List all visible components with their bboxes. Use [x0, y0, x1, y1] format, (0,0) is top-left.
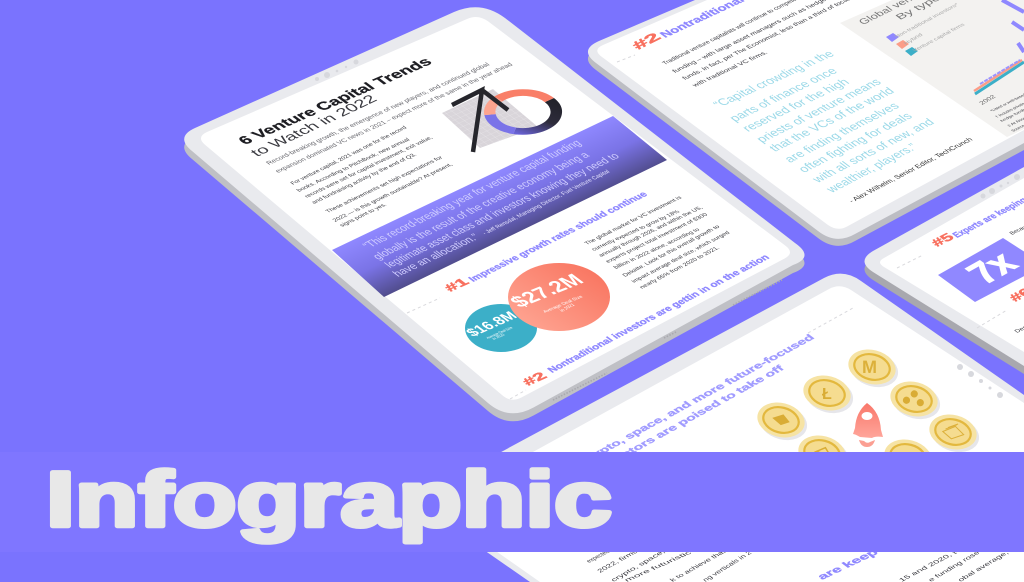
pull quote — [710, 48, 937, 195]
heading number 2: #2 — [629, 31, 665, 52]
quote text — [359, 138, 622, 279]
chart legend: Non-traditional investors* — [893, 2, 961, 39]
tablet 4 body — [412, 274, 1024, 582]
pull quote: priests of venture means — [753, 76, 884, 145]
pull quote: wealthier, players.” — [822, 141, 920, 195]
tablet 3 side text — [1006, 222, 1024, 334]
tablet 3 side — [864, 175, 1024, 374]
gold coins — [753, 345, 983, 482]
tablet 4 bezel sensors — [957, 364, 1003, 398]
body paragraph 1: books. According to PitchBook, new annual — [295, 137, 412, 193]
tablet 1 bezel sensors — [315, 60, 358, 81]
chart title — [857, 0, 958, 27]
70 chart graphic — [442, 85, 570, 152]
pull quote: “Capital crowding in the — [710, 48, 837, 110]
body paragraph 2: 2022 — is this growth sustainable? At present, — [331, 162, 455, 223]
chart footnotes: *Listed or web-based — [989, 93, 1024, 113]
growth paragraph: annually through 2026, and within the US, — [597, 205, 705, 258]
pull quote: that the VCs of the world — [766, 85, 897, 154]
growth paragraph — [583, 195, 732, 290]
growth paragraph: currently expected to grow by 18% — [590, 209, 682, 252]
tablet 2 side — [588, 7, 1024, 246]
stacked bar chart — [974, 0, 1024, 94]
circle stat: 16.8M — [462, 304, 537, 352]
axis label 2002: 2002 — [978, 94, 998, 106]
tablet 3 side text: Despite — [1013, 320, 1024, 334]
circle stat: 27.2M: in 2021 — [559, 303, 576, 313]
growth paragraph: The global market for VC investment is — [583, 195, 684, 246]
heading number 2: #2 — [519, 370, 551, 388]
tablet 3 body — [864, 167, 1024, 366]
heading number 5: #5 — [928, 231, 958, 249]
tablet 2 body — [588, 0, 1024, 239]
chart footnotes: † Includes private — [994, 102, 1024, 119]
chart footnotes: hedge funds — [999, 107, 1024, 123]
coin: ripple — [886, 377, 944, 424]
chart footnotes: Source — [1010, 124, 1024, 133]
body paragraph 1: For venture capital, 2021 was one for the record — [289, 125, 409, 186]
pull quote: parts of finance once — [726, 65, 840, 124]
tablet 2 intro paragraph — [661, 0, 852, 89]
body paragraph 1: and fundraising activity by the end of Q3. — [310, 152, 419, 205]
pull quote: often fighting for deals — [795, 110, 915, 175]
tablet 2 intro paragraph: with traditional VC firms. — [690, 50, 769, 89]
tablet 3: experts trend — [864, 167, 1024, 374]
growth paragraph: nearly 65% from 2020 to 2021. — [638, 245, 722, 290]
tablet 2: nontraditional investors — [588, 0, 1024, 246]
tablet 4: crypto and space trends — [412, 274, 1024, 582]
quote text: have an allocation.” — [389, 232, 482, 279]
growth paragraph: experts project total investment of $300 — [604, 212, 710, 264]
tablet 3 bezel sensors — [980, 174, 1020, 198]
chart footnotes — [989, 93, 1024, 133]
coin: ethereum — [753, 398, 811, 445]
chart legend: Venture capital firms — [911, 22, 966, 53]
intro text — [264, 61, 514, 174]
chart legend — [886, 2, 966, 56]
coin: litecoin: Ł — [822, 386, 832, 403]
chart title: By type of — [894, 0, 958, 22]
tablet 1: main cover: Impressive growth rates should continue — [467, 190, 650, 284]
quote text: - Jeff Rensdal, Managing Director, Fuel Venture Capital — [481, 169, 612, 236]
chart footnotes: ‡ At Nov — [1006, 116, 1024, 128]
heading: experts are keeping: are keep — [814, 547, 881, 582]
coin: partly hidden right — [880, 435, 938, 482]
tablet 3 side text: #6 — [1006, 286, 1024, 304]
circle stat: 27.2M — [505, 263, 610, 331]
body paragraph 2 — [324, 155, 455, 228]
tablet 4 body text — [585, 548, 1011, 582]
coin: monero: M — [862, 357, 877, 377]
numeral 7 — [452, 90, 508, 152]
pull quote: are finding themselves — [781, 100, 902, 165]
coin: stacks — [925, 410, 983, 457]
tablet 2 screen — [597, 0, 1024, 229]
tablet 3 screen — [880, 178, 1024, 352]
chart panel: global venture funding — [840, 0, 1024, 137]
growth paragraph: billion in 2022 alone, according to — [612, 227, 702, 270]
7x callout box: 7x — [958, 245, 1024, 290]
title — [235, 55, 436, 159]
circle stat: 16.8M: Average Deal Size — [485, 326, 514, 340]
7x callout box — [938, 238, 1024, 302]
tablet 4 body text: 2022, firms — [596, 548, 640, 574]
tablet 1 screen — [201, 17, 790, 400]
circle stat: 27.2M: $27.2M — [505, 271, 589, 311]
tablet 1 side — [184, 15, 805, 421]
tablet 4 body text: expected — [585, 549, 612, 564]
tablet 1: main cover — [184, 7, 805, 421]
tablet 1 bottom grilles — [553, 280, 782, 400]
body paragraph 2: signs point to yes. — [338, 202, 389, 228]
tablet 1 body — [184, 7, 805, 413]
body paragraph 1: records were set for capital investment, exit value, — [303, 135, 435, 199]
coin: partly hidden left — [794, 431, 852, 478]
circle stat: 27.2M: Average Deal Size — [542, 295, 584, 314]
tablet 4 screen — [433, 286, 1024, 582]
icon: rocket — [853, 403, 883, 447]
heading number 1: #1 — [441, 276, 473, 294]
tablet 3 side text: Because — [1008, 222, 1024, 236]
chart legend: Hybrid — [902, 32, 924, 46]
donut chart — [476, 85, 570, 139]
heading: crypto sectors: sectors are poised to take off — [606, 364, 787, 467]
coin: monero — [844, 345, 902, 392]
pull quote: with all sorts of new, and — [808, 116, 937, 185]
banner — [0, 452, 1024, 552]
circle stat: 16.8M: $16.8M — [462, 309, 521, 339]
circle stat: 16.8M: in 2020 — [491, 333, 506, 341]
growth paragraph: impact average deal size, which surged — [630, 230, 732, 284]
title: to Watch in 2022 — [248, 93, 381, 159]
pull quote: reserved for the high — [739, 76, 852, 134]
body paragraph 2: These achievements set high expectations for — [324, 155, 445, 214]
quote band — [332, 116, 667, 297]
heading: crypto sectors — [576, 333, 817, 467]
coin: litecoin — [799, 371, 857, 418]
banner title: Infographic — [46, 455, 612, 543]
grid background — [442, 89, 538, 148]
growth paragraph: Deloitte. Look for this overall growth to — [621, 224, 722, 278]
